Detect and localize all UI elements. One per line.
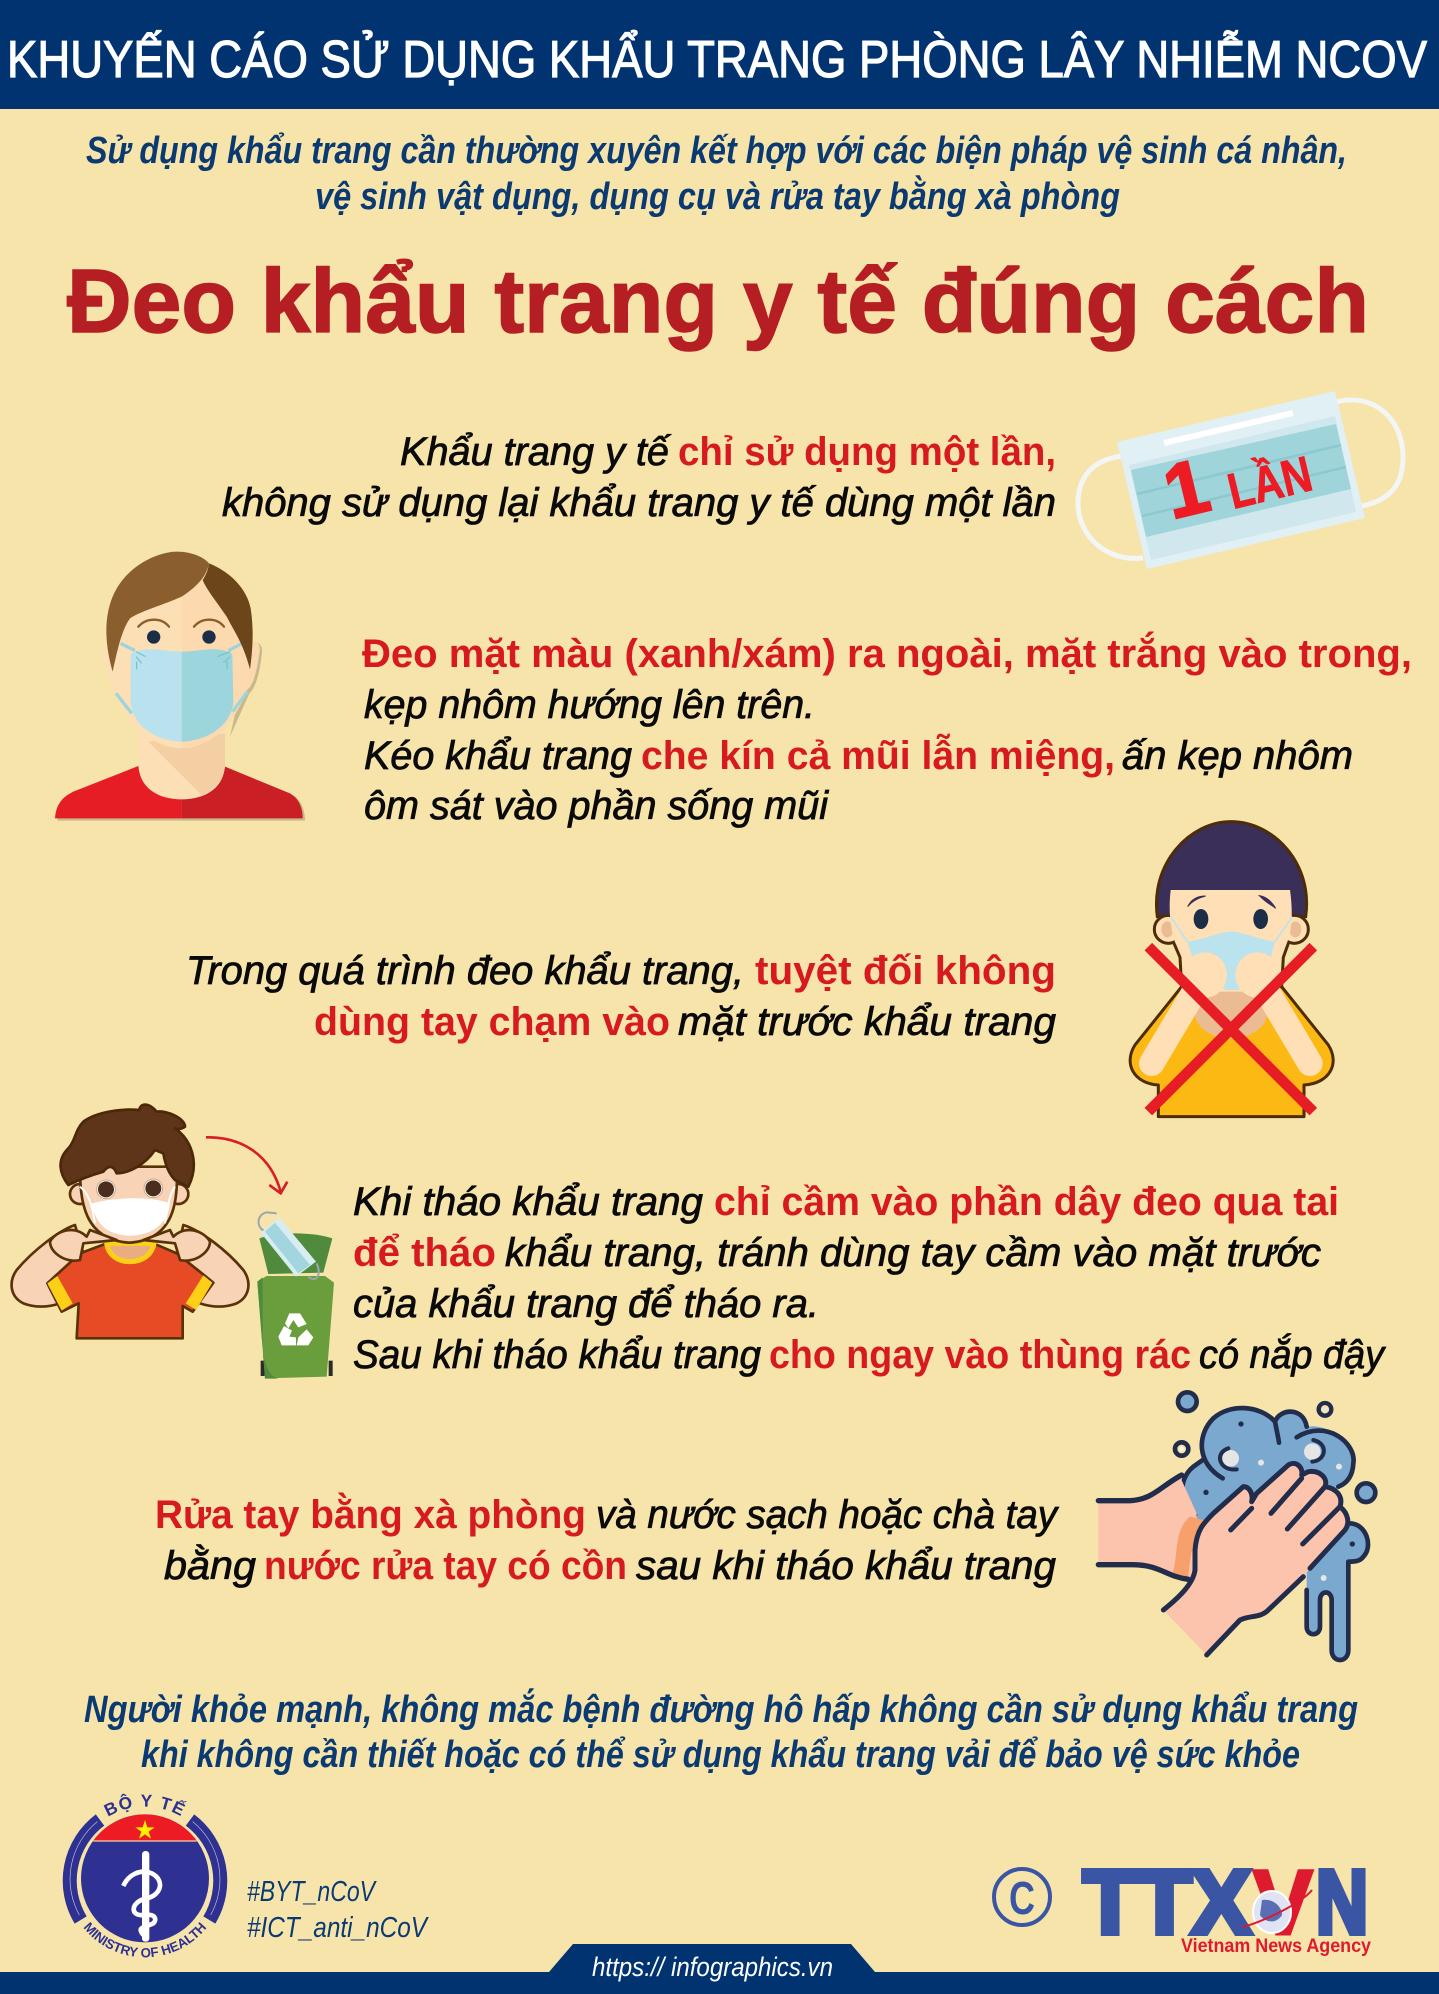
- text block: how to wear the mask: Kéo khẩu trang: [364, 734, 632, 778]
- text block: how to take off the mask: Khi tháo khẩu trang: [353, 1180, 703, 1224]
- text block: single use: [222, 430, 1056, 525]
- illustration: child touching mask crossed out: [1130, 822, 1333, 1117]
- logo: TTXVN Vietnam News Agency: Vietnam News Agency: [1181, 1936, 1371, 1957]
- text block: how to take off the mask: chỉ cầm vào phần dây đeo qua tai: [714, 1180, 1339, 1224]
- main heading: Đeo khẩu trang y tế đúng cách: [67, 252, 1369, 352]
- footer band with URL tab: [0, 1944, 1439, 1994]
- text block: how to take off the mask: cho ngay vào thùng rác: [769, 1333, 1191, 1377]
- copyright symbol: [994, 1869, 1050, 1925]
- icon: surgical mask labelled 1 lần: 1: [1156, 443, 1217, 536]
- illustration: boy removing mask, arrow and waste bin: [12, 1105, 334, 1379]
- text block: how to wear the mask: [362, 630, 1412, 828]
- text block: how to wear the mask: kẹp nhôm hướng lên trên.: [364, 683, 815, 727]
- text block: how to take off the mask: của khẩu trang để tháo ra.: [353, 1282, 819, 1326]
- text block: wash hands: sau khi tháo khẩu trang: [636, 1544, 1056, 1588]
- copyright symbol: C: [1009, 1872, 1035, 1924]
- text block: do not touch the mask: mặt trước khẩu trang: [678, 1000, 1056, 1044]
- text block: wash hands: [155, 1491, 1060, 1588]
- text block: how to take off the mask: có nắp đậy: [1199, 1332, 1387, 1377]
- logo: TTXVN Vietnam News Agency: [1083, 1852, 1371, 1957]
- waste bin with used mask: [257, 1212, 334, 1379]
- hashtags: [247, 1876, 429, 1944]
- text block: how to take off the mask: Sau khi tháo khẩu trang: [353, 1333, 761, 1377]
- illustration: hands washing with soap foam: [1098, 1392, 1375, 1660]
- header band with title: [0, 0, 1439, 109]
- text block: wash hands: Rửa tay bằng xà phòng: [155, 1491, 586, 1537]
- text block: how to wear the mask: Đeo mặt màu (xanh/xám) ra ngoài, mặt trắng vào trong,: [362, 630, 1412, 676]
- text block: do not touch the mask: dùng tay chạm vào: [314, 1000, 670, 1044]
- text block: do not touch the mask: tuyệt đối không: [755, 949, 1056, 993]
- text block: single use: Khẩu trang y tế: [400, 430, 672, 474]
- logo: Ministry of Health: BỘ Y TẾ: [104, 1794, 187, 1816]
- text block: wash hands: bằng: [164, 1543, 256, 1588]
- boy removing mask: [12, 1105, 248, 1338]
- text block: wash hands: và nước sạch hoặc chà tay: [596, 1493, 1060, 1537]
- logo: Ministry of Health: MINISTRY OF HEALTH: [84, 1922, 206, 1958]
- logo: TTXVN Vietnam News Agency: V: [1253, 1852, 1313, 1954]
- intro text: vệ sinh vật dụng, dụng cụ và rửa tay bằng xà phòng: [315, 174, 1120, 218]
- text block: wash hands: nước rửa tay có cồn: [264, 1544, 627, 1588]
- text block: how to take off the mask: để tháo: [353, 1231, 496, 1275]
- logo: TTXVN Vietnam News Agency: TTX: [1083, 1853, 1251, 1953]
- closing note: [84, 1687, 1358, 1776]
- intro text: [86, 130, 1347, 218]
- hashtags: #BYT_nCoV: [247, 1876, 377, 1908]
- icon: surgical mask labelled 1 lần: [1078, 391, 1403, 569]
- text block: do not touch the mask: [186, 949, 1056, 1044]
- text block: how to wear the mask: ôm sát vào phần sống mũi: [364, 784, 829, 828]
- text block: how to take off the mask: [353, 1180, 1387, 1377]
- arrow: [206, 1137, 287, 1193]
- text block: how to wear the mask: ấn kẹp nhôm: [1122, 734, 1353, 778]
- text block: do not touch the mask: Trong quá trình đeo khẩu trang,: [186, 949, 744, 993]
- logo: Ministry of Health: [62, 1794, 228, 1958]
- illustration: man wearing mask: [55, 552, 305, 821]
- text block: single use: chỉ sử dụng một lần,: [678, 430, 1056, 474]
- footer band with URL tab: https:// infographics.vn: [592, 1952, 833, 1982]
- logo: TTXVN Vietnam News Agency: N: [1316, 1853, 1368, 1953]
- hashtags: #ICT_anti_nCoV: [247, 1912, 429, 1944]
- text block: single use: không sử dụng lại khẩu trang y tế dùng một lần: [222, 481, 1056, 525]
- icon: surgical mask labelled 1 lần: LẦN: [1222, 446, 1317, 520]
- text block: how to take off the mask: khẩu trang, tránh dùng tay cầm vào mặt trước: [505, 1231, 1321, 1275]
- text block: how to wear the mask: che kín cả mũi lẫn miệng,: [641, 732, 1115, 778]
